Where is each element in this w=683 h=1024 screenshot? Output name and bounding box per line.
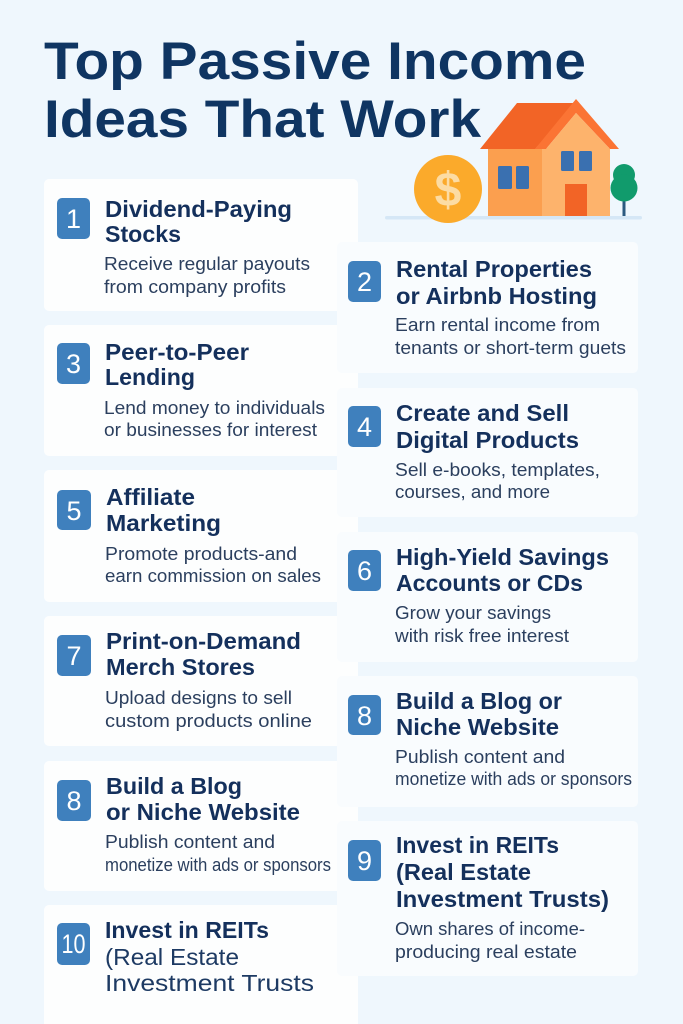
panel: 9 Invest in REITs (right): 9 [357,846,372,876]
panel: 1 Dividend-Paying Stocks: Receive regular payouts [104,254,310,274]
panel: 7 Print-on-Demand Merch Stores [44,616,358,746]
panel: 10 Invest in REITs (left): (Real Estate [105,944,239,970]
panel: 8 Build a Blog or Niche Website (right): 8 [357,701,372,731]
panel: 1 Dividend-Paying Stocks: Stocks [105,221,181,247]
title: Top Passive Income [44,32,586,91]
panel: 3 Peer-to-Peer Lending: Lend money to individuals [104,398,325,418]
panel: 3 Peer-to-Peer Lending: Lending [105,364,195,390]
panel: 9 Invest in REITs (right) [337,821,638,976]
panel: 9 Invest in REITs (right): Investment Trusts) [396,886,609,912]
panel: 9 Invest in REITs (right): Invest in REITs [396,832,559,858]
panel: 2 Rental Properties or Airbnb Hosting: 2 [357,267,372,297]
panel: 3 Peer-to-Peer Lending: or businesses for interest [104,420,317,440]
panel: 7 Print-on-Demand Merch Stores: 7 [66,641,82,671]
panel: 2 Rental Properties or Airbnb Hosting: tenants or short-term guets [395,338,626,358]
icon: house with coin and tree: $ [435,164,462,217]
panel: 7 Print-on-Demand Merch Stores: Upload designs to sell [105,688,292,708]
panel: 2 Rental Properties or Airbnb Hosting: Earn rental income from [395,315,600,335]
panel: 5 Affiliate Marketing: Affiliate [106,484,195,510]
panel: 8 Build a Blog or Niche Website (left): Publish content and [105,832,275,852]
panel: 8 Build a Blog or Niche Website (left): monetize with ads or sponsors [105,855,331,875]
panel: 8 Build a Blog or Niche Website (right): monetize with ads or sponsors [395,769,632,789]
panel: 1 Dividend-Paying Stocks: Dividend-Paying [105,196,292,222]
title: Ideas That Work [44,90,482,149]
panel: 4 Create and Sell Digital Products: Create and Sell [396,400,569,426]
panel: 5 Affiliate Marketing: Promote products-and [105,544,297,564]
panel: 8 Build a Blog or Niche Website (right) [337,676,638,807]
panel: 9 Invest in REITs (right): (Real Estate [396,859,531,885]
panel: 3 Peer-to-Peer Lending: 3 [66,349,81,379]
panel: 8 Build a Blog or Niche Website (right): Build a Blog or [396,688,562,714]
panel: 3 Peer-to-Peer Lending [44,325,358,456]
panel: 8 Build a Blog or Niche Website (left): or Niche Website [106,799,300,825]
panel: 2 Rental Properties or Airbnb Hosting [337,242,638,373]
panel: 8 Build a Blog or Niche Website (right): Publish content and [395,747,565,767]
panel: 9 Invest in REITs (right): producing real estate [395,942,577,962]
panel: 8 Build a Blog or Niche Website (left) [44,761,358,891]
panel: 5 Affiliate Marketing: earn commission on sales [105,566,321,586]
panel: 4 Create and Sell Digital Products [337,388,638,517]
panel: 6 High-Yield Savings Accounts or CDs: with risk free interest [394,626,569,646]
panel: 7 Print-on-Demand Merch Stores: Merch Stores [106,654,255,680]
panel: 10 Invest in REITs (left): Invest in REITs [105,917,269,943]
panel: 1 Dividend-Paying Stocks: 1 [66,204,81,234]
panel: 7 Print-on-Demand Merch Stores: custom products online [105,711,312,731]
panel: 6 High-Yield Savings Accounts or CDs: High-Yield Savings [396,544,609,570]
panel: 6 High-Yield Savings Accounts or CDs: Accounts or CDs [396,570,583,596]
panel: 5 Affiliate Marketing [44,470,358,602]
panel: 10 Invest in REITs (left): 10 [62,929,86,959]
panel: 3 Peer-to-Peer Lending: Peer-to-Peer [105,339,249,365]
panel: 6 High-Yield Savings Accounts or CDs: Grow your savings [395,603,551,623]
panel: 9 Invest in REITs (right): Own shares of income- [395,919,585,939]
panel: 2 Rental Properties or Airbnb Hosting: Rental Properties [396,256,592,282]
panel: 8 Build a Blog or Niche Website (left): Build a Blog [106,773,242,799]
panel: 1 Dividend-Paying Stocks [44,179,358,311]
panel: 2 Rental Properties or Airbnb Hosting: or Airbnb Hosting [396,283,597,309]
panel: 8 Build a Blog or Niche Website (left): 8 [66,786,82,816]
panel: 1 Dividend-Paying Stocks: from company profits [104,277,286,297]
panel: 6 High-Yield Savings Accounts or CDs: 6 [357,556,372,586]
panel: 4 Create and Sell Digital Products: Digital Products [396,427,579,453]
panel: 10 Invest in REITs (left) [44,905,358,1024]
panel: 6 High-Yield Savings Accounts or CDs [337,532,638,662]
panel: 4 Create and Sell Digital Products: 4 [357,412,372,442]
title [44,32,586,149]
panel: 4 Create and Sell Digital Products: courses, and more [395,482,550,502]
icon: house with coin and tree [385,99,642,223]
panel: 10 Invest in REITs (left): Investment Trusts [105,970,314,996]
panel: 7 Print-on-Demand Merch Stores: Print-on-Demand [106,628,301,654]
panel: 5 Affiliate Marketing: 5 [66,496,82,526]
panel: 5 Affiliate Marketing: Marketing [106,510,221,536]
panel: 8 Build a Blog or Niche Website (right): Niche Website [396,714,559,740]
panel: 4 Create and Sell Digital Products: Sell e-books, templates, [395,460,600,480]
